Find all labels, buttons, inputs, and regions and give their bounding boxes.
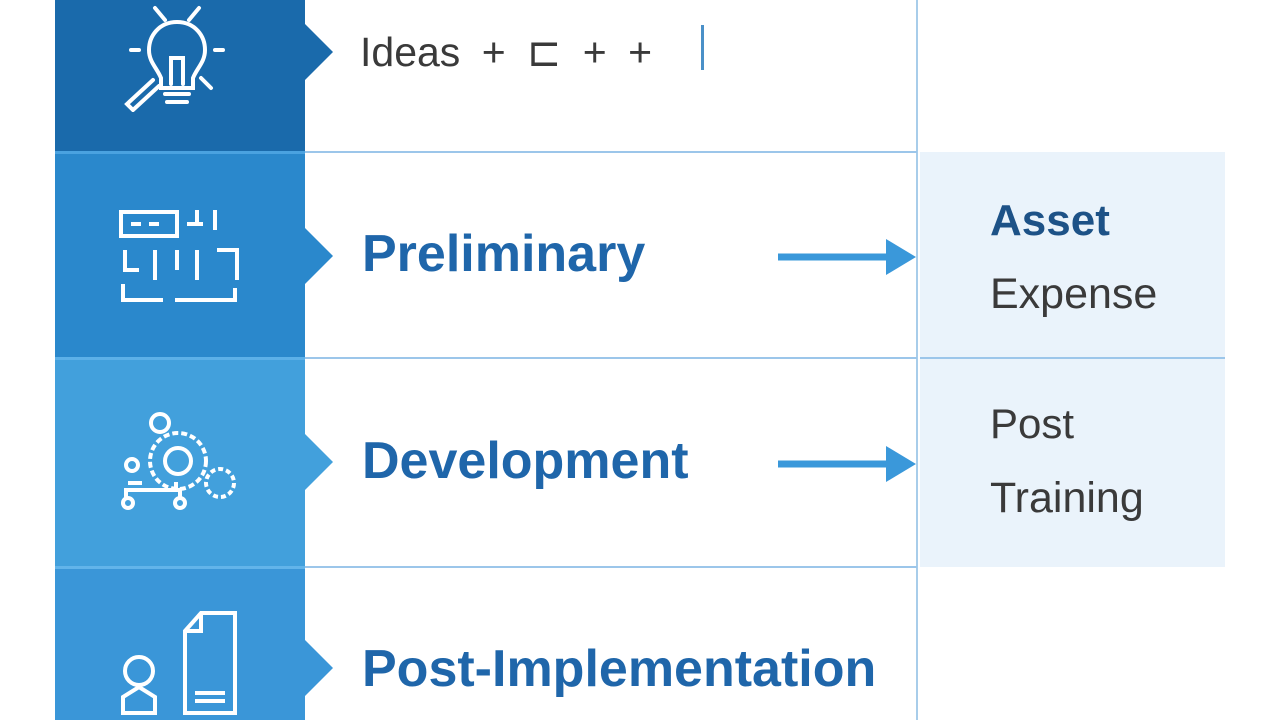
heading: development: Development <box>362 432 689 490</box>
right panel text: post / training <box>990 400 1144 522</box>
text: ideas: Ideas + ⊏ + + <box>360 29 652 75</box>
icon: person and document <box>121 611 237 715</box>
icon: lightbulb <box>124 6 225 112</box>
row 3: development <box>55 358 305 567</box>
arrow notch <box>305 434 333 490</box>
right panel text: post / training: Post <box>990 400 1074 447</box>
right panel text: asset / expense <box>990 196 1157 318</box>
heading: post-implementation: Post-Implementation <box>362 640 876 698</box>
cursor line <box>701 25 704 70</box>
right panel text: asset / expense: Expense <box>990 270 1157 318</box>
panel divider <box>920 357 1225 359</box>
right panel <box>920 152 1225 567</box>
arrow notch <box>305 228 333 284</box>
icon: gears <box>121 412 236 510</box>
row 4: post-implementation <box>55 567 305 720</box>
arrow notch <box>305 640 333 696</box>
vertical divider <box>916 0 918 720</box>
icon: blueprint <box>119 210 239 302</box>
heading: preliminary: Preliminary <box>362 225 645 283</box>
row 2: preliminary <box>55 154 305 358</box>
arrow notch <box>305 24 333 80</box>
row 1: ideas <box>55 0 305 152</box>
right panel text: asset / expense: Asset <box>990 196 1110 245</box>
arrow 1 <box>778 239 916 275</box>
arrow 2 <box>778 446 916 482</box>
right panel text: post / training: Training <box>990 474 1144 522</box>
